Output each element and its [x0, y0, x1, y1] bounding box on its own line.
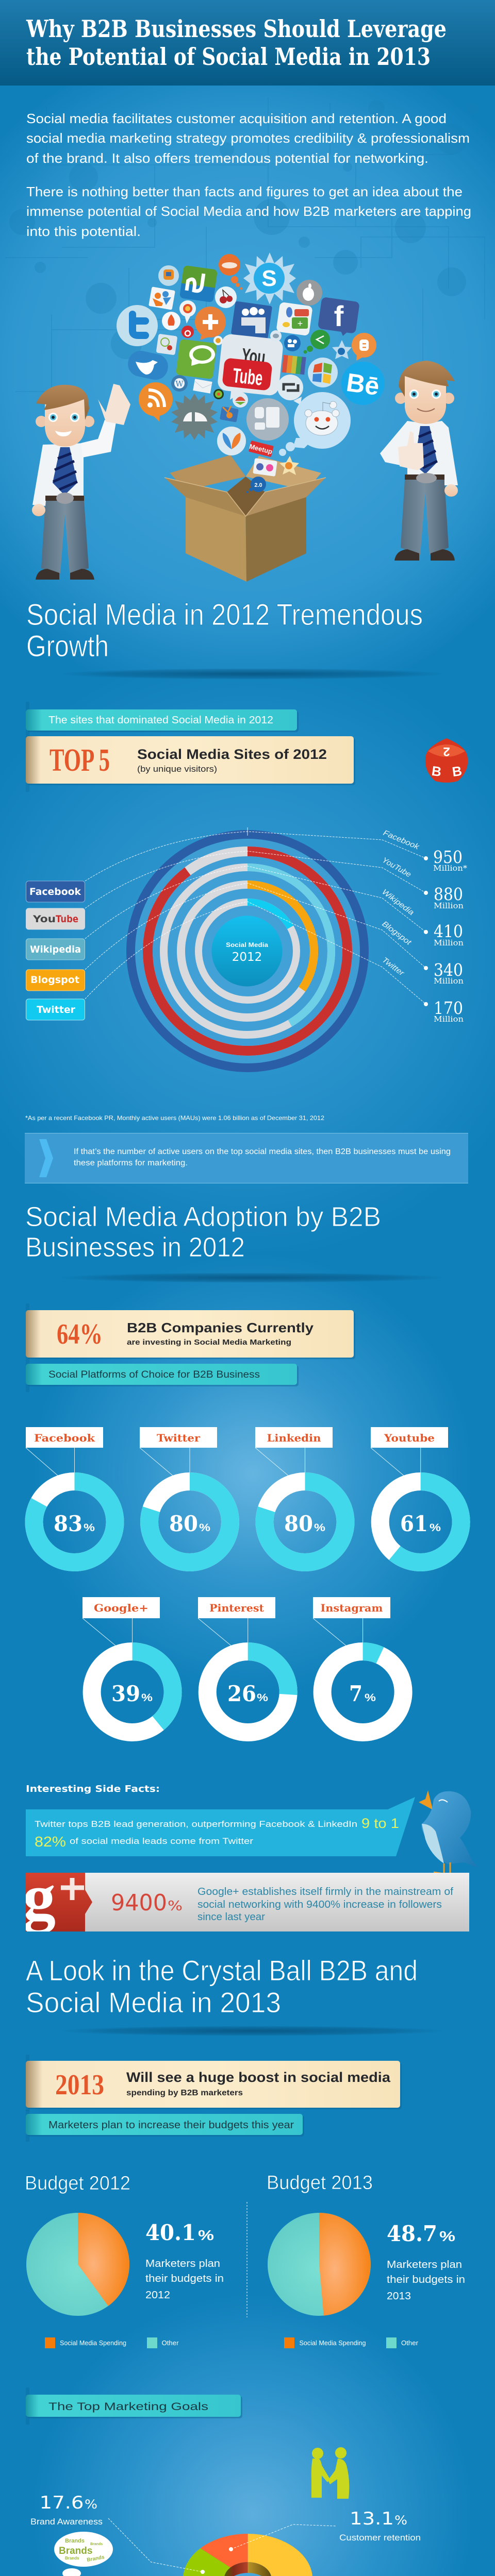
budget 2013: 48.7 [387, 2221, 437, 2246]
icon: flickr [253, 458, 277, 477]
budget 2012: 40.1 [145, 2220, 196, 2245]
donut: google+ 39%: % [141, 1692, 153, 1704]
donut: facebook 83%: 83 [54, 1511, 82, 1536]
icon: digg burst [171, 394, 218, 440]
value: 340: Million [434, 976, 464, 986]
value: 410: 410 [434, 921, 463, 941]
icon: apple [296, 280, 322, 306]
label: blogspot: Blogspot [30, 974, 79, 986]
header band [0, 0, 495, 86]
chart centre label [211, 916, 283, 987]
callout: twitter fact [26, 1797, 415, 1856]
stat: customer retention: 13.1 [350, 2509, 394, 2529]
icon: blogger [352, 333, 376, 361]
rotated site names: Wikipedia [381, 888, 416, 917]
donut: twitter 80% [140, 1427, 230, 1562]
icon: twitter bird [419, 1790, 478, 1875]
legend 2013 [284, 2337, 419, 2348]
label: wikipedia: Wikipedia [30, 944, 81, 955]
figure: waving man [32, 384, 130, 580]
intro text: into this potential. [26, 224, 141, 239]
donut: facebook 83%: Facebook [34, 1432, 95, 1444]
illustration: brand talk group: Brands [90, 2543, 103, 2546]
donut: google+ 39% [82, 1597, 173, 1732]
cream banner: top 5 [26, 736, 355, 792]
icon: B2B die: B [431, 763, 442, 779]
cream banner: top 5: Social Media Sites of 2012 [137, 747, 327, 762]
ring: facebook 950 [131, 835, 364, 1067]
callout: google+ fact: Google+ establishes itself firmly in the mainstream of [197, 1886, 453, 1897]
ring chart: top 5 sites [126, 830, 369, 1072]
rotated site names: YouTube [381, 856, 412, 879]
donut: twitter 80%: 80 [169, 1511, 198, 1536]
donut: linkedin 80%: 80 [284, 1511, 313, 1536]
intro text: of the brand. It also offers tremendous potential for networking. [26, 150, 428, 166]
icon: behance: Bē [344, 368, 381, 401]
slice: demand generation [187, 2534, 312, 2576]
cream banner: 64%: 64% [57, 1318, 103, 1350]
stat: customer retention: % [394, 2513, 407, 2528]
rotated site names: Blogspot [381, 920, 413, 947]
ring: twitter 170 [199, 902, 296, 1000]
cream banner: top 5: TOP 5 [50, 743, 110, 778]
callout: active users [25, 1133, 468, 1183]
donut: pinterest 26% [198, 1597, 288, 1732]
icon: youtube: Tube [232, 364, 264, 390]
label: facebook [26, 881, 85, 902]
budget 2012: % [198, 2227, 214, 2243]
budget 2013: 2013 [387, 2291, 411, 2302]
legend 2012: Other [162, 2339, 179, 2347]
icon: chrome bubble [233, 392, 248, 408]
donut: pinterest 26%: % [257, 1692, 268, 1704]
teal ribbon: goals: The Top Marketing Goals [48, 2401, 208, 2413]
stat: customer retention: Customer retention [339, 2533, 421, 2543]
illustration: brand talk group: Brands [65, 2556, 79, 2561]
icon: gray people bubble [246, 398, 289, 440]
label: youtube [26, 908, 85, 929]
icon: skype burst [243, 252, 296, 304]
stat: brand awareness: % [85, 2497, 97, 2512]
ring: blogspot 340 [181, 885, 314, 1018]
value: 880: Million [434, 901, 464, 910]
icon: chevron [39, 1139, 53, 1177]
icon: small bubble [270, 330, 282, 342]
donut: linkedin 80%: % [314, 1522, 325, 1534]
budget 2012: 2012 [145, 2290, 170, 2301]
ring: wikipedia 410 [164, 868, 331, 1035]
slice: brand awareness [183, 2548, 230, 2576]
figure: thumbs-up man [380, 361, 458, 561]
label: twitter [26, 999, 85, 1020]
icon: gowalla [156, 334, 177, 355]
icon: location pin [179, 300, 196, 324]
budget 2013: % [439, 2228, 455, 2244]
icon: photo camera [220, 406, 239, 422]
donut: youtube 61% [371, 1427, 461, 1562]
cream banner: 2013: 2013 [55, 2069, 104, 2101]
illustration: brand talk group: Brands [59, 2546, 92, 2556]
icon: orange star [279, 456, 299, 475]
stat: customer retention [339, 2509, 421, 2543]
icon: google buzz plus: + [298, 318, 303, 329]
budget 2012 [25, 2173, 224, 2316]
icon: skype burst: S [261, 266, 277, 291]
teal ribbon: budgets: Marketers plan to increase their budgets this year [48, 2120, 294, 2131]
donut: instagram 7%: 7 [349, 1681, 362, 1706]
cream banner: 2013: Will see a huge boost in social media [126, 2070, 391, 2085]
value: 170: 170 [434, 998, 463, 1018]
teal ribbon: goals [26, 2387, 242, 2425]
heading: adoption: Businesses in 2012 [25, 1232, 245, 1263]
label: twitter: Twitter [37, 1004, 76, 1015]
donut: pinterest 26%: Pinterest [209, 1602, 265, 1614]
pie chart 2013 [268, 2213, 371, 2316]
budget 2013: Marketers plan [387, 2259, 462, 2270]
donut: facebook 83% [26, 1427, 115, 1562]
intro text: immense potential of Social Media and how B2B marketers are tapping [26, 204, 471, 219]
icon: behance [341, 362, 385, 405]
icon: youtube [217, 333, 284, 400]
legend: site labels [26, 881, 85, 1020]
icon: twitter t [117, 305, 158, 346]
icon: plus bubble [195, 307, 226, 340]
value: 950: 950 [433, 847, 463, 867]
budget 2013: Budget 2013 [267, 2172, 373, 2194]
donut: facebook 83%: % [84, 1522, 95, 1534]
cream banner: 64%: are investing in Social Media Marketing [127, 1338, 291, 1347]
icon: B2B die: B [451, 763, 463, 779]
icon: rss bubble [139, 382, 173, 421]
cardboard box [164, 455, 326, 582]
icon: twitter bird [126, 348, 170, 382]
value: 410: Million [434, 938, 464, 947]
pie chart 2012 [26, 2213, 129, 2316]
icon: facebook [318, 297, 360, 336]
icon: google plus [26, 1873, 92, 1931]
icon: cherry bubble [215, 286, 237, 308]
cream banner: 64%: B2B Companies Currently [127, 1320, 314, 1335]
icon: web 2.0 [246, 477, 266, 493]
donut: youtube 61%: Youtube [384, 1432, 435, 1444]
heading: tremendous growth [26, 598, 446, 680]
icon: google plus: g [23, 1860, 56, 1934]
callout: google+ fact: % [168, 1899, 183, 1914]
leader lines [85, 827, 426, 1004]
chart centre label: Social Media [226, 942, 269, 948]
icon: myspace [231, 301, 272, 340]
budget divider [246, 2202, 248, 2317]
label: youtube: Tube [56, 913, 78, 925]
icon: rainbow [282, 355, 306, 375]
icon: share cloud [303, 330, 330, 353]
icon: google buzz plus [276, 302, 313, 336]
label: youtube: You [32, 913, 56, 925]
donut: linkedin 80%: Linkedin [267, 1432, 321, 1444]
faint circuit pattern background [5, 98, 485, 392]
donut: youtube 61%: % [430, 1522, 441, 1534]
stat: brand awareness: Brand Awareness [30, 2517, 103, 2527]
rotated site names: Twitter [381, 956, 406, 978]
stat: brand awareness: 17.6 [39, 2493, 84, 2513]
callout: google+ fact: since last year [197, 1911, 265, 1923]
cream banner: top 5: (by unique visitors) [137, 764, 217, 774]
icon: icq flower [213, 389, 224, 399]
icon: retweet [277, 375, 303, 405]
icon: B2B die: 2 [443, 744, 450, 758]
callout: twitter fact: 9 to 1 [361, 1816, 399, 1831]
icon: B2B die [425, 738, 468, 783]
icon: wordpress [171, 375, 188, 392]
donut: google+ 39%: Google+ [94, 1602, 148, 1614]
heading: adoption: Social Media Adoption by B2B [25, 1201, 381, 1232]
teal ribbon: sites [26, 702, 299, 738]
side facts heading: Interesting Side Facts: [26, 1784, 160, 1794]
donut: google+ 39%: 39 [111, 1681, 140, 1706]
budget 2013: their budgets in [387, 2274, 465, 2285]
intro text [26, 111, 471, 239]
donut: instagram 7%: % [365, 1692, 376, 1704]
budget 2013 [267, 2172, 465, 2316]
chart centre label: 2012 [232, 951, 262, 964]
teal ribbon: platforms: Social Platforms of Choice for B2B Business [48, 1369, 260, 1380]
illustration: brand talk group [30, 2532, 113, 2576]
icon: msn butterfly [217, 427, 246, 455]
heading: crystal ball [26, 1954, 446, 2036]
rotated site names [381, 828, 421, 978]
rotated site names: Facebook [382, 828, 421, 852]
icon: orkut friends [148, 286, 175, 310]
label: wikipedia [26, 939, 85, 960]
illustration: brand talk group: Brands [65, 2538, 85, 2544]
budget 2012: their budgets in [145, 2273, 224, 2284]
value: 340: 340 [434, 960, 463, 980]
budget 2012: Marketers plan [145, 2258, 220, 2269]
icon: green chat [176, 339, 217, 379]
legend 2013: Other [401, 2339, 419, 2347]
icon: video camera [284, 335, 301, 351]
teal ribbon: platforms [26, 1360, 299, 1392]
value: 950: Million* [433, 863, 468, 873]
icon: feedburner [162, 312, 180, 330]
icon: meetup: Meetup [249, 443, 273, 455]
donut: instagram 7%: Instagram [321, 1602, 383, 1614]
callout: active users: these platforms for marketing. [74, 1159, 188, 1167]
donut: twitter 80%: Twitter [157, 1432, 200, 1444]
3D donut chart [183, 2534, 312, 2576]
icon: drupal star [332, 340, 352, 359]
legend 2012 [45, 2337, 179, 2348]
callout: google+ fact [26, 1873, 469, 1931]
heading: tremendous growth: Growth [26, 630, 109, 663]
goal leader lines [108, 2518, 336, 2576]
icon: windows [308, 358, 338, 387]
teal ribbon: sites: The sites that dominated Social Media in 2012 [48, 715, 273, 726]
value: 880: 880 [434, 884, 463, 904]
heading: tremendous growth: Social Media in 2012 Tremendous [26, 598, 423, 632]
legend 2013: Social Media Spending [299, 2339, 366, 2347]
intro text: social media marketing strategy promotes credibility & professionalism [26, 130, 470, 146]
legend 2012: Social Media Spending [60, 2339, 126, 2347]
title [26, 15, 447, 71]
callout: active users: If that’s the number of active users on the top social media sites, then B2B businesses must be using [74, 1147, 451, 1156]
donut: linkedin 80% [255, 1427, 345, 1562]
icon: picasa [213, 336, 223, 345]
label: facebook: Facebook [29, 886, 81, 897]
heading: crystal ball: A Look in the Crystal Ball B2B and [26, 1954, 418, 1987]
teal ribbon: budgets [26, 2110, 304, 2142]
heading: crystal ball: Social Media in 2013 [26, 1986, 281, 2019]
callout: google+ fact: social networking with 9400% increase in followers [197, 1899, 442, 1910]
icon: facebook: f [334, 300, 344, 332]
icon: red b [182, 326, 194, 338]
donut: youtube 61%: 61 [400, 1511, 428, 1536]
heading: adoption [25, 1201, 446, 1283]
callout: google+ fact: 9400 [111, 1890, 167, 1916]
icon: youtube: You [241, 345, 267, 369]
icon: fofou [158, 265, 179, 286]
callout: twitter fact: 82% [35, 1834, 66, 1850]
slice: customer retention [201, 2534, 248, 2568]
cream banner: 64% [26, 1303, 355, 1360]
icon: mail [193, 379, 212, 394]
values list [424, 847, 468, 1024]
icon: wordpress: W [175, 379, 184, 388]
illustration: brand talk group: Brands [87, 2554, 105, 2563]
donut: twitter 80%: % [199, 1522, 210, 1534]
icon: reddit bubble [279, 392, 351, 456]
value: 170: Million [434, 1014, 464, 1024]
intro text: There is nothing better than facts and figures to get an idea about the [26, 184, 463, 199]
cream banner: 2013 [26, 2055, 402, 2111]
icon: web 2.0: 2.0 [254, 482, 262, 488]
ring: youtube 880 [147, 851, 348, 1051]
icon: soundcloud [219, 254, 242, 290]
donut: pinterest 26%: 26 [227, 1681, 256, 1706]
budget 2012: Budget 2012 [25, 2173, 130, 2194]
intro text: Social media facilitates customer acquisition and retention. A good [26, 111, 447, 126]
label: blogspot [26, 970, 85, 991]
illustration: handshake [311, 2447, 349, 2499]
stat: brand awareness [30, 2493, 103, 2527]
footnote: *As per a recent Facebook PR, Monthly active users (MAUs) were 1.06 billion as of December 31, 2012 [25, 1114, 324, 1122]
callout: twitter fact: Twitter tops B2B lead generation, outperforming Facebook & LinkedIn [35, 1819, 357, 1829]
donut: instagram 7% [313, 1597, 403, 1732]
callout: twitter fact: of social media leads come from Twitter [70, 1836, 253, 1846]
icon: stumbleupon [179, 265, 218, 302]
cream banner: 2013: spending by B2B marketers [126, 2089, 243, 2097]
